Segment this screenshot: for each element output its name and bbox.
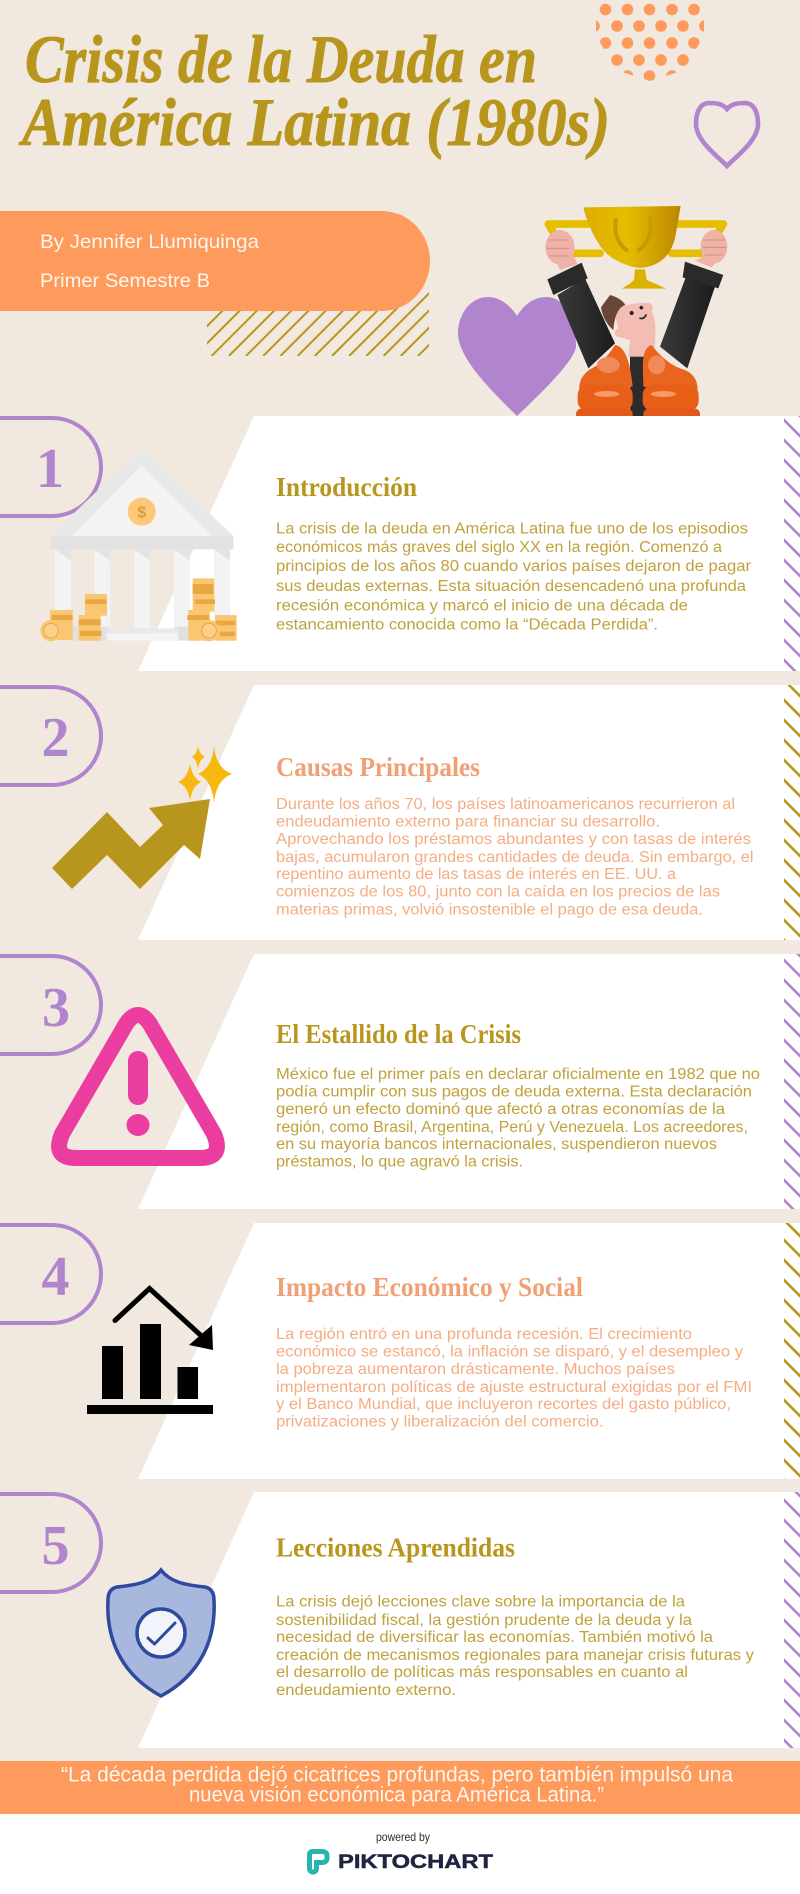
text block: causas principales: repentino aumento de las tasas de interés en EE. UU. a bbox=[276, 866, 676, 883]
closing quote banner: nueva visión económica para América Latina.” bbox=[189, 1784, 604, 1807]
text block: el estallido de la crisis: en su mayoría bancos internacionales, suspendieron nuevos bbox=[276, 1136, 717, 1153]
hands bbox=[545, 230, 727, 270]
text block: lecciones aprendidas bbox=[276, 1594, 754, 1699]
icon: warning triangle bbox=[59, 1015, 217, 1158]
text block: impacto económico y social: económico se estancó, la inflación se disparó, y el desempleo y bbox=[276, 1344, 743, 1361]
text block: introducción: principios de los años 80 cuando varios países dejaron de pagar bbox=[276, 558, 751, 575]
panel: causas principales bbox=[138, 685, 800, 940]
heading: introducción: Introducción bbox=[276, 472, 417, 502]
text block: impacto económico y social: y el Banco Mundial, que incluyeron recortes del gasto público, bbox=[276, 1396, 731, 1413]
trophy cup bbox=[583, 206, 681, 268]
head bbox=[601, 295, 655, 357]
number badge 5 bbox=[0, 1494, 101, 1592]
number badge 5: 5 bbox=[42, 1515, 70, 1577]
footer: powered by piktochart: powered by bbox=[376, 1830, 430, 1844]
number badge 3: 3 bbox=[42, 977, 70, 1039]
text block: lecciones aprendidas: La crisis dejó lecciones clave sobre la importancia de la bbox=[276, 1594, 685, 1611]
text block: causas principales: Aprovechando los préstamos abundantes y con tasas de interés bbox=[276, 831, 751, 848]
panel: introducción bbox=[138, 416, 800, 671]
closing quote banner bbox=[0, 1761, 800, 1814]
text block: lecciones aprendidas: sostenibilidad fiscal, la gestión prudente de la deuda y la bbox=[276, 1612, 692, 1629]
text block: impacto económico y social: la pobreza aumentaron drásticamente. Muchos países bbox=[276, 1361, 675, 1378]
panel: estallido de la crisis bbox=[138, 954, 800, 1209]
text block: introducción: sus deudas externas. Esta situación desencadenó una profunda bbox=[276, 578, 746, 595]
vest bbox=[576, 345, 700, 422]
trophy laurels bbox=[615, 218, 651, 250]
heading: causas principales: Causas Principales bbox=[276, 752, 480, 782]
decoration: gold hatch block bbox=[207, 292, 429, 356]
number badge 1: 1 bbox=[36, 438, 64, 500]
text block: introducción: La crisis de la deuda en América Latina fue uno de los episodios bbox=[276, 520, 748, 537]
text block: causas principales: comienzos de los 80, junto con la caída en los precios de las bbox=[276, 884, 720, 901]
text block: impacto económico y social: privatizaciones y liberalización del comercio. bbox=[276, 1414, 604, 1431]
text block: impacto económico y social bbox=[276, 1326, 752, 1431]
text block: lecciones aprendidas: el desarrollo de políticas más responsables en cuanto al bbox=[276, 1664, 688, 1681]
footer: powered by piktochart: PIKTOCHART bbox=[338, 1851, 493, 1873]
semester: Primer Semestre B bbox=[40, 270, 210, 292]
text block: el estallido de la crisis: generó un efecto dominó que afectó a otras economías de la bbox=[276, 1101, 725, 1118]
text block: introducción bbox=[276, 520, 751, 633]
text block: introducción: económicos más graves del siglo XX en la región. Comenzó a bbox=[276, 539, 722, 556]
text block: causas principales: endeudamiento externo para financiar su desarrollo. bbox=[276, 814, 660, 831]
icon: filled purple heart bbox=[458, 297, 576, 416]
icon: rising zigzag arrow bbox=[52, 799, 210, 889]
author banner bbox=[0, 211, 430, 311]
number badge 2 bbox=[0, 687, 101, 785]
trophy handles bbox=[548, 224, 723, 253]
title bbox=[18, 21, 610, 160]
text block: el estallido de la crisis: México fue el primer país en declarar oficialmente en 1982 que no bbox=[276, 1066, 760, 1083]
number badge 3 bbox=[0, 956, 101, 1054]
text block: introducción: estancamiento conocida como la “Década Perdida”. bbox=[276, 616, 658, 633]
icon: falling bar chart bbox=[87, 1288, 213, 1414]
text block: causas principales: Durante los años 70, los países latinoamericanos recurrieron al bbox=[276, 796, 735, 813]
icon: shield with check bbox=[108, 1570, 214, 1696]
arms bbox=[547, 262, 723, 368]
icon: bank with coins: $ bbox=[137, 504, 146, 521]
footer: powered by piktochart bbox=[0, 1814, 800, 1894]
icon: outline heart bbox=[696, 103, 758, 166]
text block: impacto económico y social: implementaron políticas de ajuste estructural exigidas por el FMI bbox=[276, 1379, 752, 1396]
text block: causas principales bbox=[276, 796, 754, 918]
text block: el estallido de la crisis: préstamos, lo que agravó la crisis. bbox=[276, 1154, 523, 1171]
closing quote banner: “La década perdida dejó cicatrices profundas, pero también impulsó una bbox=[61, 1764, 733, 1787]
heading: impacto económico y social: Impacto Económico y Social bbox=[276, 1272, 583, 1302]
title: América Latina (1980s) bbox=[18, 84, 610, 160]
icon: sparkles bbox=[178, 746, 232, 803]
icon: piktochart logo bbox=[310, 1852, 327, 1872]
trophy stem and base bbox=[622, 269, 666, 289]
number badge 2: 2 bbox=[42, 707, 70, 769]
text block: causas principales: materias primas, volvió insostenible el pago de esa deuda. bbox=[276, 902, 703, 918]
text block: el estallido de la crisis bbox=[276, 1066, 760, 1171]
panel: lecciones aprendidas bbox=[138, 1492, 800, 1748]
number badge 4 bbox=[0, 1225, 101, 1323]
illustration: person holding trophy bbox=[545, 206, 727, 422]
number badge 4: 4 bbox=[42, 1246, 70, 1308]
text block: el estallido de la crisis: podía cumplir con sus pagos de deuda externa. Esta declaración bbox=[276, 1084, 752, 1101]
text block: lecciones aprendidas: necesidad de diversificar las economías. También motivó la bbox=[276, 1629, 713, 1646]
icon: bank with coins bbox=[40, 448, 237, 641]
text block: lecciones aprendidas: creación de mecanismos regionales para manejar crisis futuras y bbox=[276, 1647, 754, 1664]
author name: By Jennifer Llumiquinga bbox=[40, 231, 259, 253]
text block: causas principales: bajas, acumularon grandes cantidades de deuda. Sin embargo, el bbox=[276, 849, 754, 866]
text block: el estallido de la crisis: región, como Brasil, Argentina, Perú y Venezuela. Los acreedores, bbox=[276, 1119, 748, 1136]
decoration: orange dotted heart bbox=[596, 4, 704, 81]
text block: introducción: recesión económica y marcó el inicio de una década de bbox=[276, 597, 688, 614]
text block: lecciones aprendidas: endeudamiento externo. bbox=[276, 1682, 456, 1699]
panel: impacto económico bbox=[138, 1223, 800, 1479]
heading: lecciones aprendidas: Lecciones Aprendidas bbox=[276, 1533, 515, 1563]
title: Crisis de la Deuda en bbox=[25, 21, 537, 97]
text block: impacto económico y social: La región entró en una profunda recesión. El crecimiento bbox=[276, 1326, 692, 1343]
heading: el estallido de la crisis: El Estallido de la Crisis bbox=[276, 1019, 521, 1049]
number badge 1 bbox=[0, 418, 101, 516]
